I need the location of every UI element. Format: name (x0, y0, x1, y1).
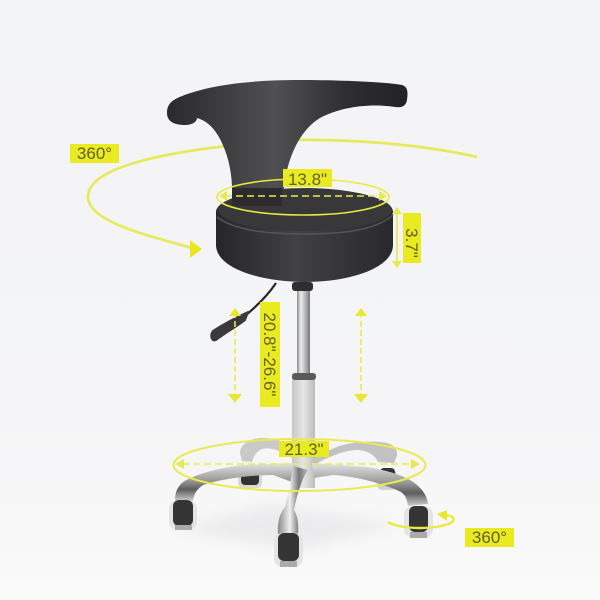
pole sleeve (292, 376, 315, 488)
pole collar (292, 373, 316, 380)
right base leg (312, 463, 428, 506)
stool (167, 80, 433, 567)
backrest (167, 80, 407, 200)
label: upper 360: 360° (77, 144, 112, 163)
left base leg (175, 463, 293, 501)
base diameter marker (174, 439, 426, 491)
seat cushion (216, 188, 393, 282)
height lever (211, 283, 276, 340)
rear casters (238, 468, 397, 490)
label: height range: 20.8"-26.6" (260, 313, 279, 396)
front casters (169, 500, 433, 567)
seat seam (217, 215, 393, 234)
seat diameter marker (217, 169, 389, 215)
label: 3.7: 3.7" (402, 228, 421, 258)
caster rotation arrow (388, 510, 454, 528)
front base leg (278, 466, 308, 534)
rear base legs (240, 438, 292, 462)
label: 13.8: 13.8" (288, 170, 327, 189)
height range arrow right (354, 308, 368, 403)
large 360 degree rotation arrow (88, 140, 477, 258)
pole (297, 290, 310, 376)
label: 21.3: 21.3" (284, 440, 324, 459)
seat top (218, 189, 392, 231)
pole bearing (292, 282, 313, 291)
seat height marker (392, 207, 421, 268)
label: lower 360: 360° (472, 528, 507, 547)
floor shadow (170, 505, 400, 550)
height range arrow left (228, 308, 242, 403)
